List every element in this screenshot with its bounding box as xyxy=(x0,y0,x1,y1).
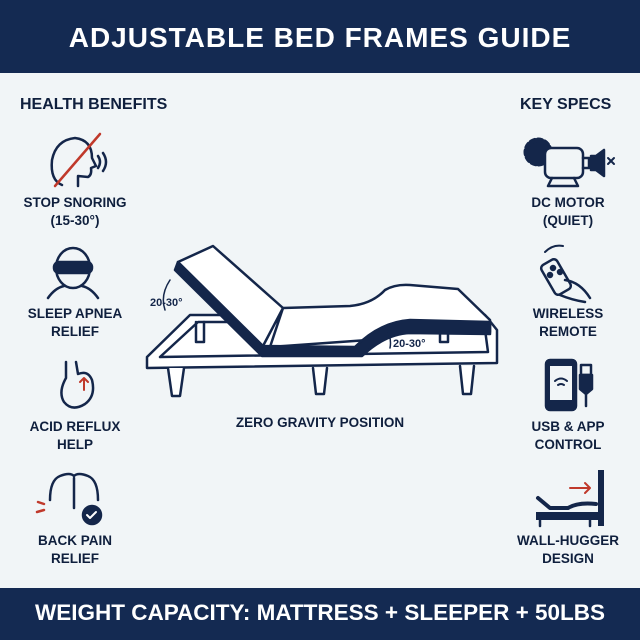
frame xyxy=(147,315,497,368)
angle label: foot: 20-30° xyxy=(393,338,426,350)
label: stop snoring: (15-30°) xyxy=(51,213,99,228)
icon: sleep mask face xyxy=(48,248,98,298)
label: acid reflux xyxy=(30,419,120,452)
label: usb app xyxy=(531,419,604,452)
label: stop snoring: STOP SNORING xyxy=(23,195,127,210)
foot mattress xyxy=(270,285,490,347)
heading: health benefits: HEALTH BENEFITS xyxy=(20,96,167,113)
icon: stomach xyxy=(61,362,93,408)
label: acid reflux: ACID REFLUX xyxy=(30,419,120,434)
base band xyxy=(175,262,490,356)
label: dc motor: DC MOTOR xyxy=(531,195,605,210)
label: wall hugger: DESIGN xyxy=(542,551,594,566)
label: wall hugger xyxy=(517,533,619,566)
footer xyxy=(0,588,640,640)
label: wall hugger: WALL-HUGGER xyxy=(517,533,619,548)
label: dc motor: (QUIET) xyxy=(543,213,593,228)
title xyxy=(0,0,640,73)
label: dc motor xyxy=(531,195,605,228)
label: sleep apnea xyxy=(28,306,122,339)
legs xyxy=(168,366,474,396)
label: usb app: CONTROL xyxy=(535,437,601,452)
label: stop snoring xyxy=(23,195,127,228)
icon: remote xyxy=(540,246,590,302)
label: acid reflux: HELP xyxy=(57,437,93,452)
label: back pain: BACK PAIN xyxy=(38,533,112,548)
label: wireless remote: REMOTE xyxy=(539,324,597,339)
label: usb app: USB & APP xyxy=(531,419,604,434)
label: back pain: RELIEF xyxy=(51,551,99,566)
title: ADJUSTABLE BED FRAMES GUIDE xyxy=(69,22,571,53)
icon: wall hugger xyxy=(536,470,604,526)
angle label: head: 20-30° xyxy=(150,297,183,309)
footer: WEIGHT CAPACITY: MATTRESS + SLEEPER + 50LBS xyxy=(35,600,605,625)
caption: zero gravity: ZERO GRAVITY POSITION xyxy=(236,415,404,430)
icon: phone usb xyxy=(546,360,592,410)
illustration: adjustable bed xyxy=(147,246,497,396)
heading: key specs: KEY SPECS xyxy=(520,96,611,113)
icon: snoring head xyxy=(52,134,106,186)
icon: back pain xyxy=(37,474,101,524)
angle arcs xyxy=(163,280,390,348)
label: wireless remote: WIRELESS xyxy=(533,306,603,321)
label: sleep apnea: RELIEF xyxy=(51,324,99,339)
label: wireless remote xyxy=(532,306,603,339)
head mattress xyxy=(178,246,283,346)
icon: dc motor xyxy=(526,140,614,186)
label: back pain xyxy=(38,533,112,566)
label: sleep apnea: SLEEP APNEA xyxy=(28,306,122,321)
